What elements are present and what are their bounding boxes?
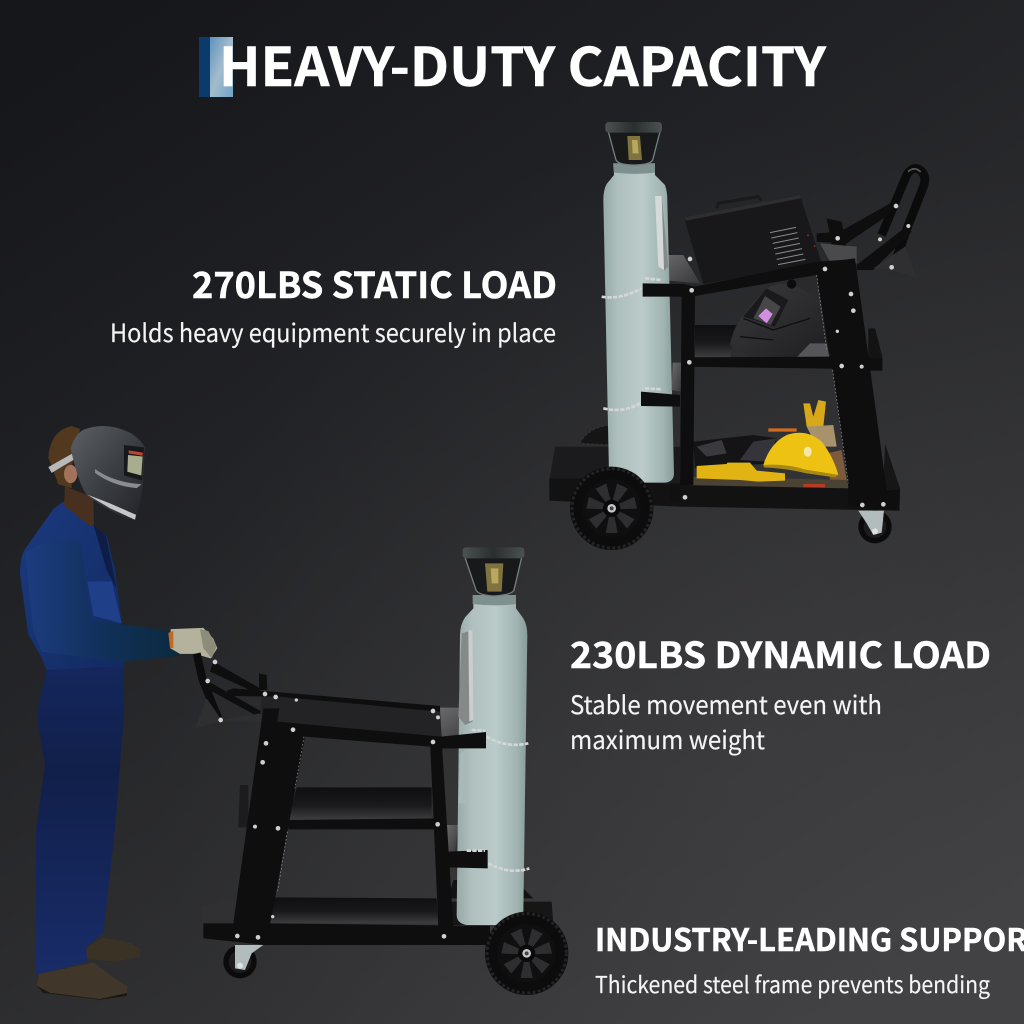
hair and ear xyxy=(48,426,80,488)
swivel caster xyxy=(223,945,263,978)
perforated frame edge xyxy=(277,737,304,893)
handle assembly xyxy=(817,168,925,278)
welder machine xyxy=(684,195,822,284)
text block: industry-leading support: Thickened steel frame prevents bending xyxy=(595,966,990,1000)
mask viewing window xyxy=(124,445,144,480)
text block: static load xyxy=(110,257,557,350)
middle shelf tray xyxy=(238,785,432,827)
perforated frame edge xyxy=(817,275,848,483)
lower bracket top xyxy=(446,825,458,852)
top shelf surface xyxy=(662,255,700,283)
glove xyxy=(168,628,217,658)
front wheel xyxy=(570,467,653,550)
upper rail xyxy=(227,688,440,715)
text block: static load: 270LBS STATIC LOAD xyxy=(192,257,557,309)
rear wheel xyxy=(580,425,612,445)
title xyxy=(199,26,827,102)
cart frame xyxy=(203,708,552,945)
icon: yellow hard hat xyxy=(763,433,838,477)
welding helmet xyxy=(730,279,829,357)
cylinder safety cap xyxy=(463,547,524,605)
cart base with trays xyxy=(549,443,900,511)
chains xyxy=(467,730,529,871)
coverall torso xyxy=(20,501,124,670)
icon: title accent block xyxy=(199,37,233,97)
text block: dynamic load: maximum weight xyxy=(570,721,766,757)
bottom tools xyxy=(693,400,848,488)
frame bolts xyxy=(683,204,910,507)
text block: static load: Holds heavy equipment securely in place xyxy=(110,314,556,350)
front wheel xyxy=(485,912,568,995)
welding mask xyxy=(71,426,145,520)
base tray xyxy=(202,897,553,938)
gas cylinder xyxy=(457,547,527,925)
rear wheel xyxy=(448,880,533,898)
handle assembly xyxy=(195,653,267,728)
loaded welding cart with gas cylinder xyxy=(549,122,925,550)
neck xyxy=(64,486,94,526)
text block: dynamic load: 230LBS DYNAMIC LOAD xyxy=(570,627,991,679)
swivel caster xyxy=(858,510,892,543)
text block: dynamic load xyxy=(570,627,991,757)
boots xyxy=(37,938,141,1000)
worker pushing the cart xyxy=(20,426,217,1000)
text block: dynamic load: Stable movement even with xyxy=(570,686,882,722)
middle shelf tray xyxy=(695,325,740,357)
lower bracket top xyxy=(672,363,681,392)
top shelf xyxy=(260,697,442,737)
gas cylinder xyxy=(603,122,674,483)
cylinder safety cap xyxy=(605,122,662,174)
heading text: HEAVY-DUTY CAPACITY xyxy=(219,26,827,102)
empty cart pushed by worker with gas cylinder xyxy=(195,547,568,995)
coverall legs xyxy=(36,665,124,975)
text block: industry-leading support xyxy=(595,915,1024,1000)
frame bolts xyxy=(205,660,446,940)
cart frame xyxy=(641,258,900,511)
chains xyxy=(602,278,662,410)
sleeve xyxy=(25,541,180,661)
